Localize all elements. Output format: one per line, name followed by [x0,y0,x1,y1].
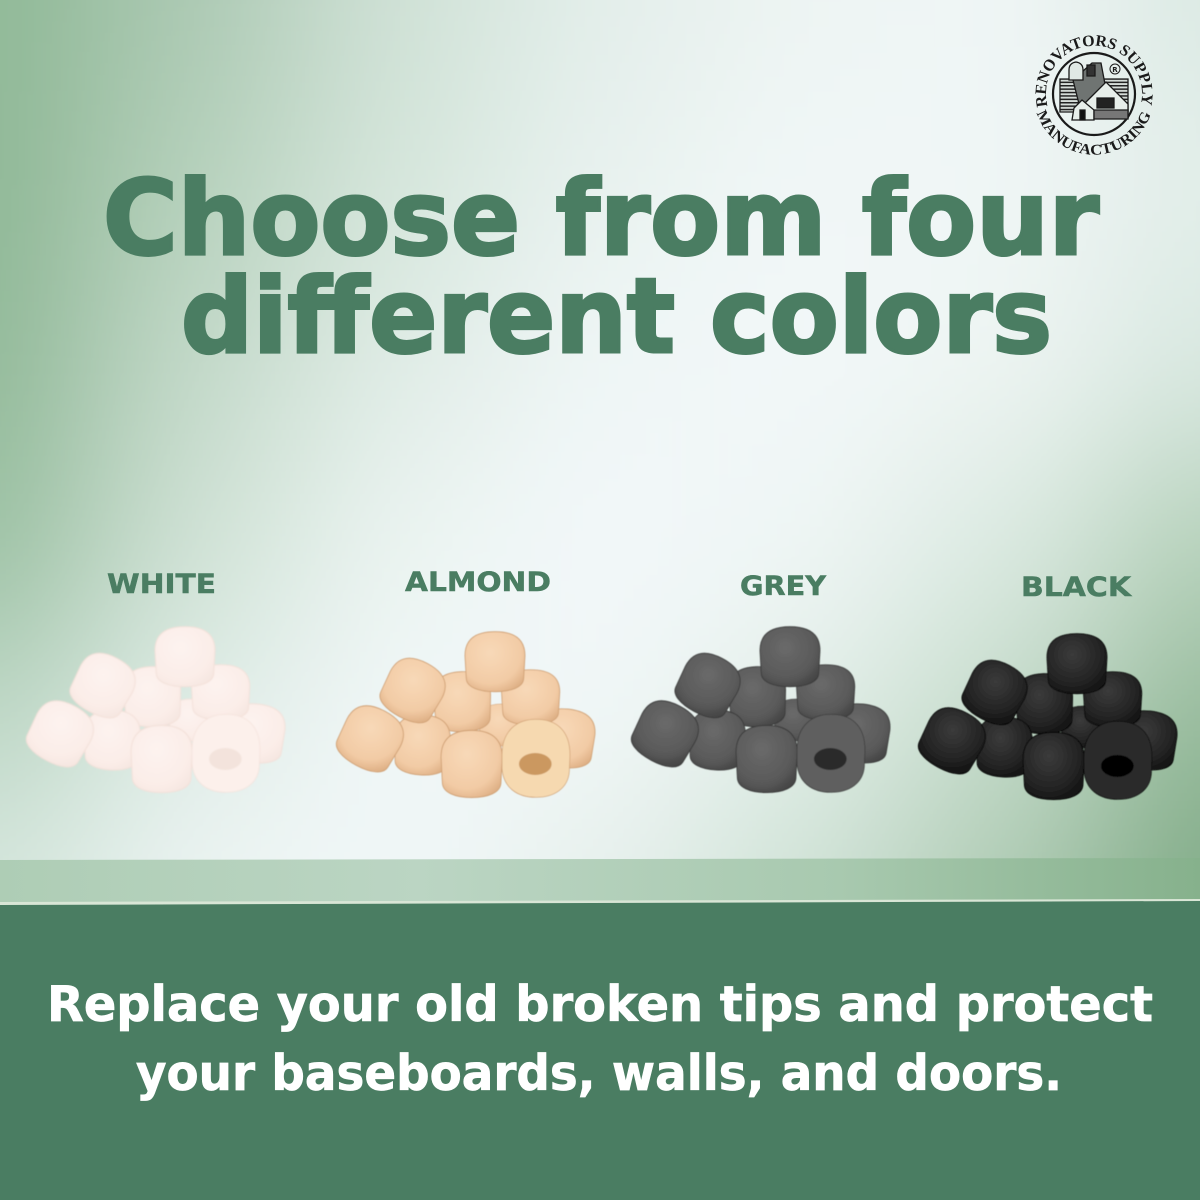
pile: almond [330,632,597,798]
footer text: Replace your old broken tips and protect [47,976,1153,1033]
logo lettering: RENOVATORS SUPPLY [1035,35,1153,108]
title: Choose from four [103,159,1099,279]
footer text [47,976,1153,1102]
label: almond: ALMOND [405,567,551,598]
logo [1035,35,1153,155]
background gradient [0,0,1200,860]
registered mark: R [1112,66,1118,74]
footer text: your baseboards, walls, and doors. [136,1045,1062,1102]
title [103,159,1099,377]
label: black: BLACK [1021,572,1132,603]
logo lettering: MANUFACTURING [1036,109,1150,155]
footer panel [0,899,1200,1200]
title: different colors [181,257,1052,377]
logo lettering [1035,35,1153,155]
logo house [1060,62,1128,120]
pile: white [20,627,287,793]
label: white: WHITE [107,569,216,600]
ledge band [0,858,1200,905]
label: grey: GREY [740,571,826,602]
pile: grey [625,627,892,793]
pile: black [912,634,1179,800]
